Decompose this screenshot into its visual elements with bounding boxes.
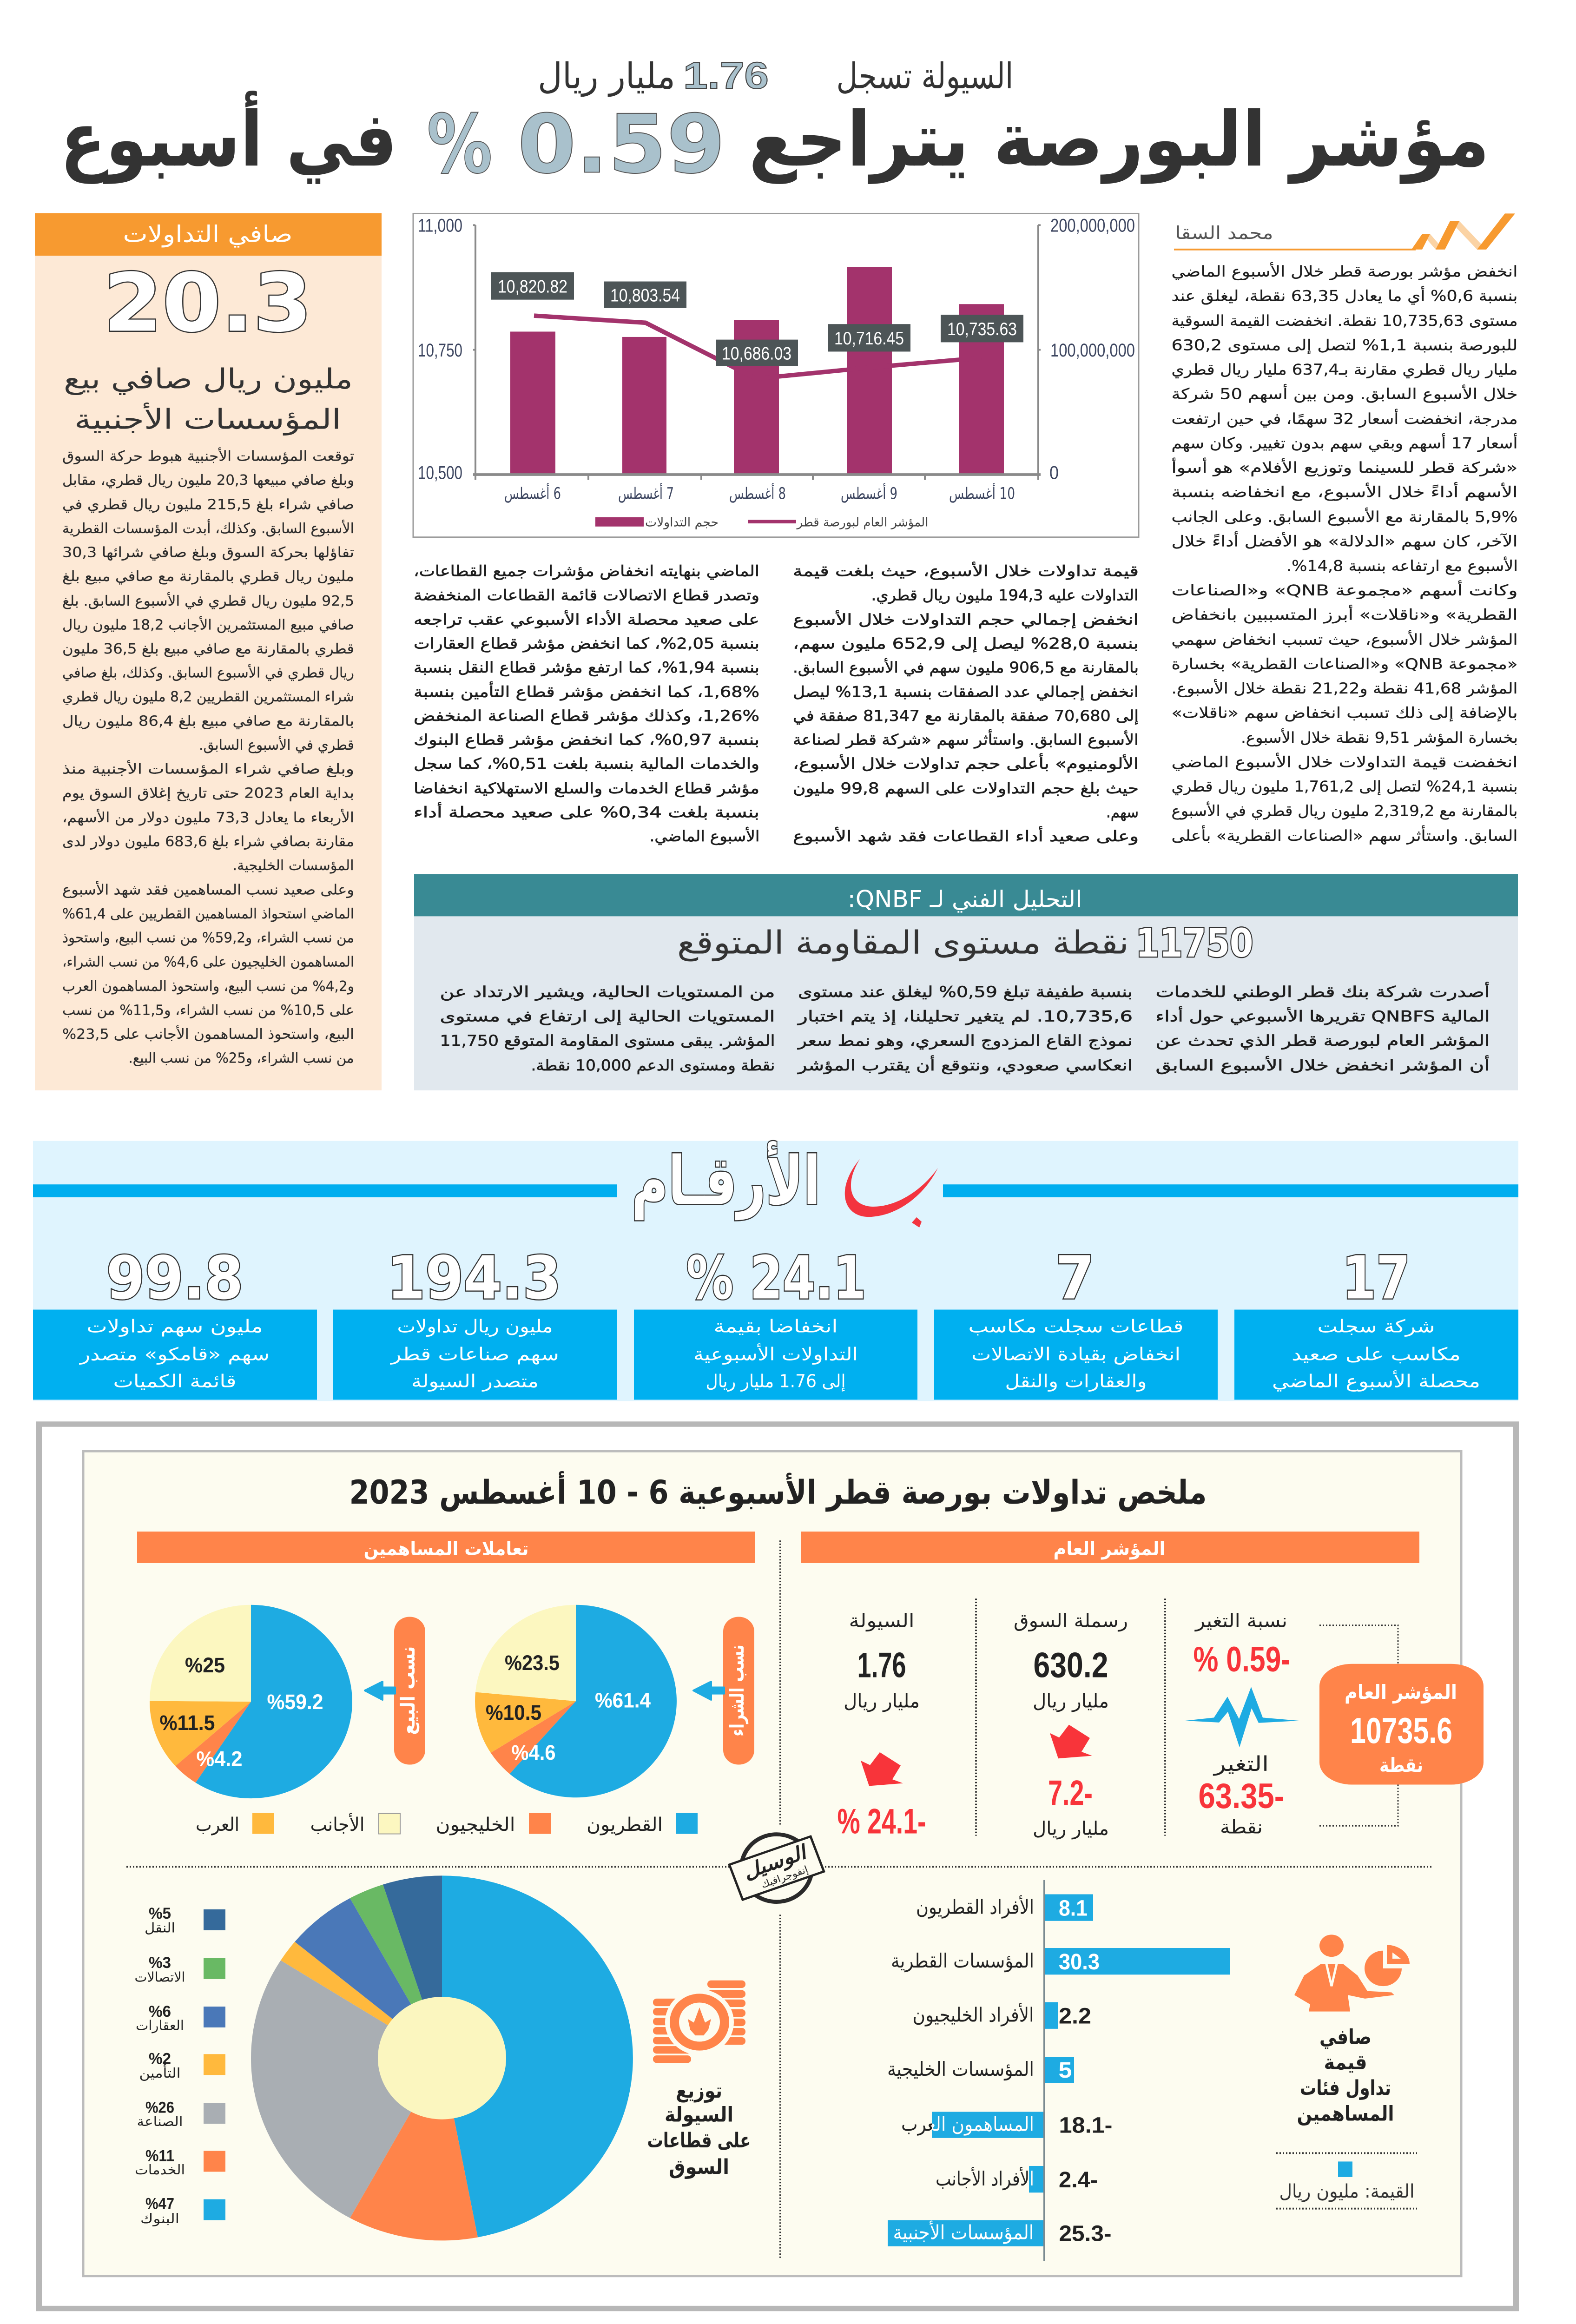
stat: 7: انخفاض بقيادة الاتصالات (971, 1344, 1180, 1365)
donut legend: الصناعة (137, 2114, 183, 2129)
pie chart: sell ratios: %4.2 (196, 1747, 242, 1770)
sidebar body text: الأربعاء ما يعادل 73,3 مليون دولار من الأسهم، (62, 809, 354, 826)
stat: 7: والعقارات والنقل (1005, 1372, 1147, 1392)
article column: middle: الألومنيوم» بأعلى حجم تداولات خلال الأسبوع، (793, 753, 1139, 772)
main title: في أسبوع (60, 91, 397, 184)
sidebar body text: توقعت المؤسسات الأجنبية هبوط حركة السوق (62, 447, 354, 464)
chart value labels: 10,686.03 (722, 343, 791, 363)
chart value labels: 10,735.63 (947, 319, 1017, 339)
row: foreign institutions: 25.3- (1059, 2221, 1112, 2246)
liquidity column: % 24.1- (837, 1801, 926, 1841)
market cap column (1014, 1610, 1128, 1839)
article column: right: خلال الأسبوع السابق. ومن بين أسهم 50 شركة (1171, 384, 1518, 403)
article column: middle: الأسبوع السابق. واستأثر سهم «شركة قطر لصناعة (793, 729, 1139, 749)
by the numbers title: الأرقـام (631, 1141, 821, 1220)
sidebar body text: ريال قطري في الأسبوع السابق. وكذلك، بلغ صافي (62, 664, 354, 681)
pie legend: القطريون (587, 1814, 663, 1835)
sidebar body text: 92,5 مليون ريال قطري في الأسبوع السابق. بلغ (62, 592, 354, 609)
article column: right: مستوى 10,735,63 نقطة. انخفضت القيمة السوقية (1171, 312, 1518, 330)
change column (1185, 1610, 1299, 1838)
resistance level heading: 11750 (1136, 921, 1253, 966)
sidebar body text: الماضي استحواذ المساهمين القطريين على 61,4% (62, 906, 354, 922)
pie chart: sell ratios: %59.2 (267, 1690, 323, 1714)
main title: مؤشر البورصة يتراجع (749, 96, 1490, 184)
subtitle (538, 54, 1013, 98)
row: Gulf institutions: 5 (1059, 2058, 1072, 2083)
icon: pulse (1185, 1687, 1299, 1747)
market cap column: 7.2- (1048, 1773, 1093, 1813)
sidebar body text: وبلغ صافي شراء المؤسسات الأجنبية منذ (62, 760, 354, 778)
article column: right: انخفض مؤشر بورصة قطر خلال الأسبوع الماضي (1171, 262, 1518, 281)
pie chart: buy ratios: %23.5 (505, 1651, 560, 1675)
stat: 99.8 (33, 1243, 317, 1400)
row: Qatari individuals: 8.1 (1059, 1896, 1088, 1921)
article column: right: أسعار 17 أسهم وبقي سهم بدون تغيير. وكان سهم (1171, 433, 1518, 452)
sidebar body text: وعلى صعيد نسب المساهمين فقد شهد الأسبوع (62, 881, 354, 898)
article column: middle: التداولات عليه 194,3 مليون ريال قطري. (871, 586, 1139, 604)
sell ratios pill: نسب البيع (396, 1646, 419, 1735)
main title: 0.59 (518, 97, 725, 191)
stat: 194.3 (333, 1243, 617, 1400)
subtitle: مليار ريال (538, 56, 675, 97)
panel: by the numbers (33, 1141, 1518, 1401)
technical text column 1: أصدرت شركة بنك قطر الوطني للخدمات (1156, 982, 1490, 1001)
pie chart: buy ratios: %61.4 (595, 1688, 651, 1712)
section header: general index (801, 1532, 1419, 1563)
stat: 99.8: مليون سهم تداولات (87, 1316, 263, 1337)
summary title: ملخص تداولات بورصة قطر الأسبوعية 6 - 10 أغسطس 2023 (349, 1471, 1207, 1512)
chart legend: المؤشر العام لبورصة قطر (796, 515, 929, 530)
technical text column 1: أن المؤشر انخفض خلال الأسبوع السابق (1156, 1056, 1490, 1075)
chart axis labels: 0 (1049, 462, 1059, 483)
sidebar body text: من نسب الشراء، و25% من نسب البيع. (128, 1050, 354, 1066)
article column: left: الأسبوع الماضي. (650, 827, 760, 845)
chart legend: حجم التداولات (645, 515, 719, 530)
article column: left: والخدمات المالية بنسبة بلغت 0,51%، كما سجل (414, 755, 759, 772)
donut legend: %26 (145, 2099, 174, 2116)
buy ratios pill (693, 1617, 754, 1765)
icon: red down arrow (861, 1752, 903, 1786)
article column: middle: بنسبة 28,0% ليصل إلى 652,9 مليون سهم، (793, 634, 1139, 653)
donut legend: %2 (149, 2050, 171, 2067)
article column: middle: انخفض إجمالي حجم التداولات خلال الأسبوع (793, 610, 1139, 629)
section header: shareholder transactions: تعاملات المساهمين (364, 1538, 529, 1560)
row: Arab investors: المساهمون العرب (901, 2113, 1034, 2136)
row: Arab investors: المساهمون العرب (901, 2113, 1034, 2136)
chart axis labels: 200,000,000 (1050, 215, 1135, 236)
sidebar body text: على 10,5% من نسب الشراء، و11,5% من نسب (62, 1002, 354, 1018)
liquidity column: 1.76 (857, 1645, 906, 1685)
row: Gulf individuals: 2.2 (1059, 2004, 1091, 2028)
donut legend: %3 (149, 1954, 171, 1972)
article column: right: الآخر، كان سهم «الدلالة» هو الأفضل أداءً خلال (1171, 532, 1518, 550)
stat: 17: 17 (1342, 1243, 1410, 1313)
index box with connector: نقطة (1379, 1754, 1423, 1777)
change column: نقطة (1220, 1816, 1263, 1838)
donut legend: النقل (145, 1920, 175, 1935)
bar and line chart (413, 213, 1139, 537)
sidebar header (35, 213, 382, 256)
chart bars (510, 267, 1004, 474)
bar chart: net trading value by category (887, 1880, 1230, 2261)
chart axis labels: 9 أغسطس (841, 483, 897, 503)
article column: left: بنسبة بلغت 0,34% على صعيد محصلة أداء (414, 802, 759, 821)
row: Qatari institutions (891, 1948, 1230, 1974)
market cap column: مليار ريال (1033, 1690, 1109, 1712)
stat: 17 (1234, 1243, 1518, 1400)
row: Gulf institutions: المؤسسات الخليجية (887, 2058, 1034, 2081)
sidebar body text: بالمقارنة مع صافي مبيع بلغ 86,4 مليون ريال (62, 713, 354, 729)
article column: right: بالمقارنة مع 2,319,2 مليون ريال قطري في الأسبوع (1171, 801, 1518, 819)
row: Qatari individuals (916, 1894, 1093, 1921)
section header: general index: المؤشر العام (1053, 1538, 1166, 1560)
stat: 24.1 percent: انخفاضا بقيمة (714, 1316, 838, 1337)
article column: right: وكانت أسهم «مجموعة QNB» و«الصناعات (1171, 581, 1518, 599)
technical text column 3: من المستويات الحالية، ويشير الارتداد عن (440, 983, 775, 1001)
pie legend: الخليجيون (436, 1814, 515, 1835)
sidebar body text: مليون ريال قطري بالمقارنة مع صافي مبيع بلغ (62, 568, 354, 585)
chart value labels (491, 272, 1023, 366)
icon: businessman with pie chart (1294, 1934, 1410, 2012)
article column: right: بنسبة 24,1% لتصل إلى 1,761,2 مليون ريال قطري (1171, 778, 1518, 796)
technical text column 3: المستويات الحالية إلى ارتفاع في مستوى (440, 1007, 775, 1025)
stat: 17: محصلة الأسبوع الماضي (1272, 1370, 1480, 1392)
article column: right: بخسارة المؤشر 9,51 نقطة خلال الأسبوع. (1241, 728, 1518, 746)
sidebar heading: المؤسسات الأجنبية (74, 403, 341, 436)
sidebar body text: من نسب الشراء، و59,2% من نسب البيع، واستحوذ (62, 930, 354, 946)
article column: right: المؤشر 41,68 نقطة و21,22 نقطة خلال الأسبوع. (1171, 679, 1518, 697)
caption: liquidity by sector: السوق (669, 2155, 729, 2179)
article column: left: 1,26%، وكذلك مؤشر قطاع الصناعة المنخفض (414, 707, 759, 725)
value legend: القيمة: مليون ريال (1279, 2180, 1415, 2202)
article column: right: انخفضت قيمة التداولات خلال الأسبوع الماضي (1171, 753, 1518, 771)
article column: right: الأسهم أداءً خلال الأسبوع، مع انخفاضه بنسبة (1171, 482, 1518, 501)
chart value labels: 10,716.45 (834, 329, 904, 349)
technical text column 1 (1156, 982, 1490, 1075)
row: foreign individuals: الأفراد الأجانب (936, 2166, 1034, 2191)
stat: 17: شركة سجلت (1318, 1316, 1435, 1337)
sidebar body text (62, 447, 354, 1066)
sidebar body text: المساهمون الخليجيون على 4,6% من نسب الشراء، (62, 954, 354, 970)
resistance level heading (677, 921, 1253, 966)
row: Gulf individuals: الأفراد الخليجيون (913, 2003, 1034, 2027)
sidebar header: صافي التداولات (123, 221, 293, 248)
row: Gulf individuals (913, 2002, 1091, 2029)
liquidity column: السيولة (849, 1610, 915, 1631)
article column: left: مؤشر قطاع الخدمات والسلع الاستهلاكية انخفاضا (414, 779, 759, 797)
main title (60, 91, 1490, 191)
author byline with zigzag icon (1174, 213, 1515, 251)
stamp: Al Waseel infographic: الوسيل (740, 1841, 811, 1884)
chart legend (595, 515, 929, 530)
pie chart: buy ratios: %4.6 (511, 1741, 556, 1764)
chart axis labels (418, 215, 1135, 503)
article column: middle: حيث بلغ حجم التداولات على السهم 99,8 مليون (793, 779, 1139, 797)
donut legend: العقارات (136, 2018, 184, 2034)
market cap column: مليار ريال (1033, 1817, 1109, 1839)
article column: left: 1,68%، كما انخفض مؤشر قطاع التأمين بنسبة (414, 681, 759, 701)
article column: right (1171, 262, 1518, 845)
stat: 7: قطاعات سجلت مكاسب (969, 1316, 1184, 1337)
donut legend: البنوك (140, 2211, 179, 2226)
sidebar body text: الأسبوع السابق. وكذلك، أبدت المؤسسات القطرية (62, 519, 354, 537)
donut legend: الاتصالات (134, 1969, 185, 1985)
chart axis labels: 100,000,000 (1050, 340, 1135, 361)
icon: red down arrow (1050, 1725, 1092, 1758)
pie chart: sell ratios: %11.5 (160, 1711, 215, 1735)
chart axis labels: 7 أغسطس (618, 483, 674, 503)
sidebar body text: مقارنة بصافي شراء بلغ 683,6 مليون دولار لدى (62, 833, 354, 850)
stat: 24.1 percent: التداولات الأسبوعية (693, 1343, 858, 1365)
caption: liquidity by sector: على قطاعات (647, 2128, 751, 2152)
stat: 99.8: سهم «قامكو» متصدر (79, 1344, 270, 1365)
stat: 194.3: 194.3 (387, 1243, 561, 1313)
article column: middle: وعلى صعيد أداء القطاعات فقد شهد الأسبوع (793, 826, 1139, 845)
chart axis labels: 6 أغسطس (504, 483, 561, 503)
stat: 99.8: 99.8 (106, 1243, 244, 1313)
donut legend: %5 (149, 1905, 171, 1922)
caption: liquidity by sector: توزيع (676, 2079, 722, 2103)
chart axis labels: 10,500 (418, 462, 462, 483)
index box with connector: المؤشر العام (1345, 1681, 1457, 1704)
article column: right: الأسبوع مع ارتفاعه بنسبة 14,8%. (1286, 556, 1518, 574)
technical text column 3: المؤشر. يبقى مستوى المقاومة المتوقع 11,750 (440, 1032, 775, 1050)
chart line (534, 316, 981, 379)
chart axis labels: 8 أغسطس (729, 483, 786, 503)
article column: middle: بالمقارنة مع 906,5 مليون سهم في الأسبوع السابق. (793, 658, 1139, 677)
change column: % 0.59- (1194, 1639, 1291, 1679)
row: foreign individuals (936, 2166, 1098, 2192)
sidebar body text: صافي شراء بلغ 215,5 مليون ريال قطري في (62, 496, 354, 513)
chart value labels: 10,803.54 (610, 285, 680, 305)
technical text column 1: المالية QNBFS تقريرها الأسبوعي حول أداء (1156, 1006, 1490, 1025)
stat: 7: 7 (1055, 1243, 1095, 1313)
article column: left: بنسبة 0,97%، كما انخفض مؤشر قطاع البنوك (414, 731, 759, 749)
change column: نسبة التغير (1194, 1610, 1287, 1631)
pie legend: العرب (196, 1814, 239, 1835)
index box with connector (1319, 1625, 1484, 1826)
sidebar body text: صافي مبيع المستثمرين الأجانب 18,2 مليون ريال (62, 616, 354, 633)
sell ratios pill (365, 1617, 425, 1765)
article column: right: «مجموعة QNB» و«الصناعات القطرية» بخسارة (1171, 655, 1517, 673)
sidebar body text: و4,2% من نسب البيع، واستحوذ المساهمون العرب (62, 978, 354, 995)
stat: 24.1 percent: % 24.1 (686, 1243, 866, 1313)
subtitle: السيولة تسجل (837, 56, 1014, 98)
row: foreign individuals: الأفراد الأجانب (936, 2166, 1034, 2191)
donut legend (134, 1905, 225, 2226)
change column: 63.35- (1198, 1776, 1284, 1816)
stamp: Al Waseel infographic (729, 1835, 824, 1902)
pie legend: الأجانب (310, 1813, 365, 1835)
article column: middle: انخفض إجمالي عدد الصفقات بنسبة 13,1% ليصل (793, 683, 1139, 701)
technical text column 2: انعكاسي صعودي، ونتوقع أن يقترب المؤشر (797, 1056, 1133, 1074)
chart value labels: 10,820.82 (498, 277, 567, 297)
article column: right: بنسبة 0,6% أي ما يعادل 63,35 نقطة، ليغلق عند (1171, 286, 1517, 305)
resistance level heading: نقطة مستوى المقاومة المتوقع (677, 924, 1129, 962)
technical text column 2: نموذج القاع المزدوج السعري، وهو نمط سعر (797, 1032, 1133, 1050)
sidebar body text: تفاؤلها بحركة السوق وبلغ صافي شرائها 30,3 (62, 544, 354, 561)
article column: right: «شركة قطر للسينما وتوزيع الأفلام» هو أسوأ (1171, 458, 1518, 476)
row: Arab investors (901, 2112, 1113, 2138)
pie chart: buy ratios: %10.5 (486, 1701, 541, 1724)
sidebar body text: شراء المستثمرين القطريين 8,2 مليون ريال قطري (62, 689, 354, 705)
chart axis labels: 10,750 (418, 340, 462, 361)
sidebar heading (64, 363, 353, 436)
technical text column 2 (797, 983, 1133, 1074)
subtitle: 1.76 (683, 54, 769, 97)
stat: 17: مكاسب على صعيد (1292, 1344, 1461, 1365)
index box with connector: 10735.6 (1350, 1710, 1452, 1750)
donut legend: %11 (145, 2147, 174, 2165)
sidebar big number: 20.3 (103, 256, 312, 350)
pie legend (196, 1813, 698, 1835)
article column: right: المؤشر خلال الأسبوع، حيث تسبب انخفاض سهمي (1171, 630, 1517, 649)
caption: liquidity by sector (647, 2079, 751, 2179)
article column: right: القطرية» و«ناقلات» أبرز المتسببين بانخفاض (1171, 605, 1518, 624)
technical text column 2: 10,735,6. لم يتغير تحليلنا، إذ يتم اختبار (797, 1007, 1133, 1025)
row: Qatari institutions: 30.3 (1059, 1950, 1100, 1974)
row: foreign institutions (888, 2220, 1112, 2246)
sidebar body text: قطري في الأسبوع السابق. (199, 736, 354, 753)
sidebar heading: مليون ريال صافي بيع (64, 363, 353, 395)
article column: middle: سهم. (1106, 803, 1139, 821)
pie chart: sell ratios (150, 1605, 352, 1798)
stamp: Al Waseel infographic: إنفوجرافيك (759, 1864, 810, 1891)
stat: 194.3: سهم صناعات قطر (390, 1344, 559, 1365)
sidebar body text: قطري بالمقارنة مع صافي مبيع بلغ 36,5 مليون (62, 641, 354, 657)
stat: 7 (934, 1243, 1218, 1400)
caption: liquidity by sector: السيولة (665, 2102, 733, 2126)
chart axis labels: 11,000 (418, 215, 462, 236)
row: Qatari individuals: الأفراد القطريون (916, 1895, 1034, 1919)
liquidity column: مليار ريال (844, 1690, 920, 1712)
article column: right: مدرجة، انخفضت أسعار 32 سهمًا، في حين ارتفعت (1171, 409, 1517, 428)
sidebar body text: وبلغ صافي مبيعها 20,3 مليون ريال قطري، مقابل (62, 472, 354, 489)
article column: left: على صعيد محصلة الأداء الأسبوعي عقب تراجعه (414, 610, 759, 628)
stat: 194.3: متصدر السيولة (411, 1372, 539, 1392)
article column: right: 5,9% بالمقارنة مع الأسبوع السابق. وعلى الجانب (1171, 508, 1518, 526)
donut legend: %6 (149, 2003, 171, 2020)
panel: technical analysis (414, 874, 1518, 1090)
icon: coins (653, 1981, 745, 2063)
market cap column: 630.2 (1034, 1645, 1108, 1685)
author byline with zigzag icon: محمد السقا (1175, 223, 1273, 244)
panel: weekly trading summary (39, 1424, 1516, 2309)
article column: left: بنسبة 1,94%، كما ارتفع مؤشر قطاع النقل بنسبة (414, 659, 759, 676)
donut legend: الخدمات (135, 2162, 185, 2178)
article column: left: الماضي بنهايته انخفاض مؤشرات جميع القطاعات، (414, 562, 759, 581)
donut chart: liquidity by sector (251, 1875, 633, 2240)
stat: 24.1 percent: إلى 1.76 مليار ريال (706, 1372, 846, 1392)
sidebar body text: المؤسسات الخليجية. (233, 858, 354, 874)
change column: التغير (1213, 1752, 1269, 1776)
technical text column 2: بنسبة طفيفة تبلغ 0,59% ليغلق عند مستوى (798, 983, 1133, 1001)
buy ratios pill: نسب الشراء (725, 1644, 748, 1736)
article column: middle: إلى 70,680 صفقة بالمقارنة مع 81,347 صفقة في (793, 707, 1139, 725)
value legend (1276, 2153, 1417, 2209)
caption: net trading value: قيمة (1324, 2050, 1367, 2074)
stat: 194.3: مليون ريال تداولات (397, 1316, 553, 1337)
donut legend: %47 (145, 2195, 174, 2212)
article column: middle (793, 561, 1139, 845)
technical text column 3 (440, 983, 775, 1074)
caption: net trading value: صافي (1319, 2025, 1372, 2049)
market cap column: رسملة السوق (1014, 1610, 1128, 1631)
article column: middle: قيمة تداولات خلال الأسبوع، حيث بلغت قيمة (793, 561, 1139, 580)
pie chart: sell ratios: %25 (185, 1653, 225, 1677)
row: Qatari institutions: المؤسسات القطرية (891, 1950, 1034, 1973)
technical analysis header (414, 874, 1518, 916)
article column: right: بالإضافة إلى ذلك تسبب انخفاض سهم «ناقلات» (1171, 704, 1518, 722)
technical text column 3: نقطة ومستوى الدعم 10,000 نقطة. (531, 1056, 775, 1074)
technical analysis header: التحليل الفني لـ QNBF: (848, 885, 1082, 913)
chart axis labels: 10 أغسطس (949, 483, 1015, 503)
article column: right: مليار ريال قطري مقارنة بـ637,4 مليار ريال قطري (1171, 361, 1517, 378)
row: Arab investors: 18.1- (1059, 2113, 1113, 2138)
article column: right: السابق. واستأثر سهم «الصناعات القطرية» بأعلى (1171, 825, 1518, 845)
liquidity column (837, 1610, 926, 1841)
article column: right: للبورصة بنسبة 1,1% لتصل إلى مستوى 630,2 (1171, 336, 1518, 354)
technical text column 1: المؤشر العام لبورصة قطر الذي تحدث عن (1156, 1032, 1490, 1050)
pie chart: buy ratios (475, 1605, 677, 1797)
row: foreign individuals: 2.4- (1059, 2168, 1098, 2192)
caption: net trading value: المساهمين (1297, 2102, 1394, 2126)
article column: left: وتصدر قطاع الاتصالات قائمة القطاعات المنخفضة (414, 586, 759, 604)
section header: shareholder transactions (137, 1532, 755, 1563)
caption: net trading value (1297, 2025, 1394, 2126)
donut legend: التأمين (139, 2064, 181, 2081)
stat: 99.8: قائمة الكميات (113, 1372, 237, 1392)
caption: net trading value: تداول فئات (1300, 2076, 1391, 2100)
sidebar body text: بداية العام 2023 حتى تاريخ إغلاق السوق يوم (62, 785, 354, 801)
row: foreign institutions: المؤسسات الأجنبية (893, 2220, 1034, 2244)
article column: left (414, 562, 760, 845)
article column: left: بنسبة 2,05%، كما انخفض مؤشر قطاع العقارات (414, 634, 759, 653)
stat: 24.1 percent (634, 1243, 917, 1400)
sidebar body text: البيع، واستحوذ المساهمون الأجانب على 23,5% (62, 1025, 354, 1043)
panel: net trading sidebar (35, 213, 382, 1090)
main title: % (427, 97, 493, 191)
